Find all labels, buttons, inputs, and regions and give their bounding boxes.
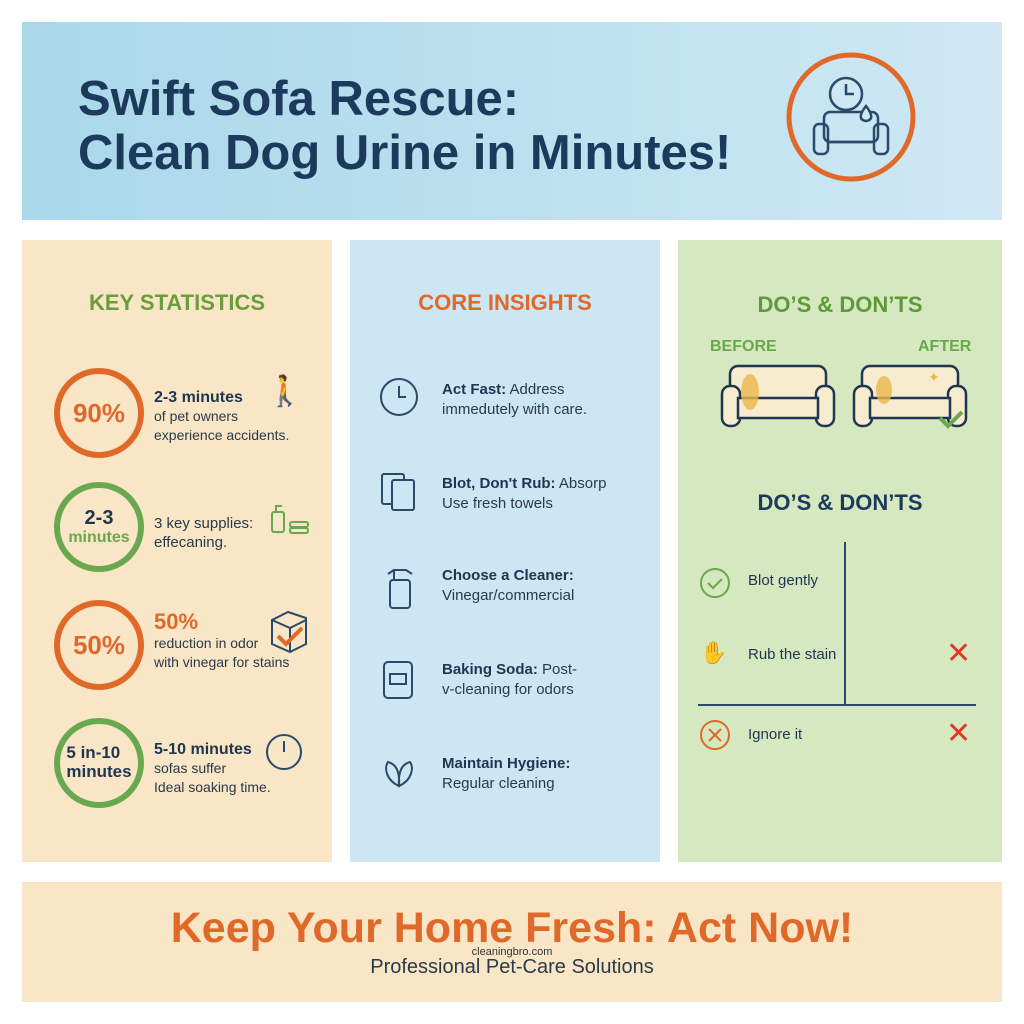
stat 2: minutes	[68, 529, 130, 546]
stat 1: experience accidents.	[154, 427, 289, 443]
stat 1: of pet owners	[154, 408, 238, 424]
insight 2	[381, 473, 606, 512]
panel: core insights	[350, 240, 660, 862]
stat 3: reduction in odor	[154, 635, 258, 651]
do: blot: Blot gently	[748, 572, 818, 589]
insight 1: Act Fast: Address	[442, 381, 565, 398]
dont: ignore: Ignore it	[748, 726, 802, 743]
stat 1: 90%	[73, 398, 125, 428]
panel: dos and donts	[678, 240, 1002, 862]
footer banner	[22, 882, 1002, 1002]
stat 4: minutes	[66, 762, 132, 781]
stat 2: effecaning.	[154, 534, 227, 551]
insight 5: Regular cleaning	[442, 775, 555, 792]
before/after sofas: ✦	[928, 369, 940, 385]
stat 4: sofas suffer	[154, 760, 226, 776]
stat 3: with vinegar for stains	[154, 654, 289, 670]
stat 2: 3 key supplies:	[154, 515, 253, 532]
stat 2	[54, 482, 309, 572]
stat 3: 50%	[154, 609, 198, 634]
stat 1: 2-3 minutes	[154, 389, 243, 406]
insight 4: v-cleaning for odors	[442, 681, 574, 698]
insight 5	[385, 755, 570, 792]
insight 3: Vinegar/commercial	[442, 587, 574, 604]
insight 1	[380, 378, 587, 418]
insight 4: Baking Soda: Post-	[442, 661, 577, 678]
title	[78, 72, 731, 180]
heading: CORE INSIGHTS	[418, 290, 592, 315]
insight 3	[388, 567, 574, 609]
after label: AFTER	[918, 338, 971, 355]
stat 4: 5-10 minutes	[154, 741, 252, 758]
heading: DO’S & DON’TS	[757, 292, 922, 317]
do: blot	[700, 568, 818, 598]
insight 3: Choose a Cleaner:	[442, 567, 574, 584]
before label: BEFORE	[710, 338, 777, 355]
insight 2: Use fresh towels	[442, 495, 553, 512]
subheading: DO’S & DON’TS	[757, 490, 922, 515]
dont: rub: ✕	[946, 637, 971, 670]
stat 3: 50%	[73, 630, 125, 660]
stat 1	[54, 368, 303, 458]
heading: KEY STATISTICS	[89, 290, 265, 315]
subtitle: Professional Pet-Care Solutions	[370, 956, 654, 978]
insight 5: Maintain Hygiene:	[442, 755, 570, 772]
dont: rub: Rub the stain	[748, 646, 836, 663]
dont: rub: ✋	[700, 640, 727, 665]
panel: key statistics	[22, 240, 332, 862]
insight 2: Blot, Don't Rub: Absorp	[442, 475, 606, 492]
stat 2: 2-3	[85, 507, 113, 529]
header banner	[22, 22, 1002, 220]
source: cleaningbro.com	[472, 946, 552, 958]
dont: ignore: ✕	[946, 717, 971, 750]
before/after sofas	[720, 364, 968, 429]
table	[698, 542, 976, 750]
insight 4	[383, 661, 577, 699]
stat 3	[54, 600, 307, 690]
title: Clean Dog Urine in Minutes!	[78, 126, 731, 180]
stat 1: 🚶	[266, 375, 303, 408]
insight 1: immedutely with care.	[442, 401, 587, 418]
icon: sofa clock	[786, 52, 916, 182]
stat 4: 5 in-10	[66, 743, 120, 762]
call to action: Keep Your Home Fresh: Act Now!	[171, 904, 853, 952]
stat 4	[54, 718, 302, 808]
dont: ignore	[700, 717, 971, 750]
title: Swift Sofa Rescue:	[78, 72, 519, 126]
dont: rub	[700, 637, 971, 670]
stat 4: Ideal soaking time.	[154, 779, 271, 795]
